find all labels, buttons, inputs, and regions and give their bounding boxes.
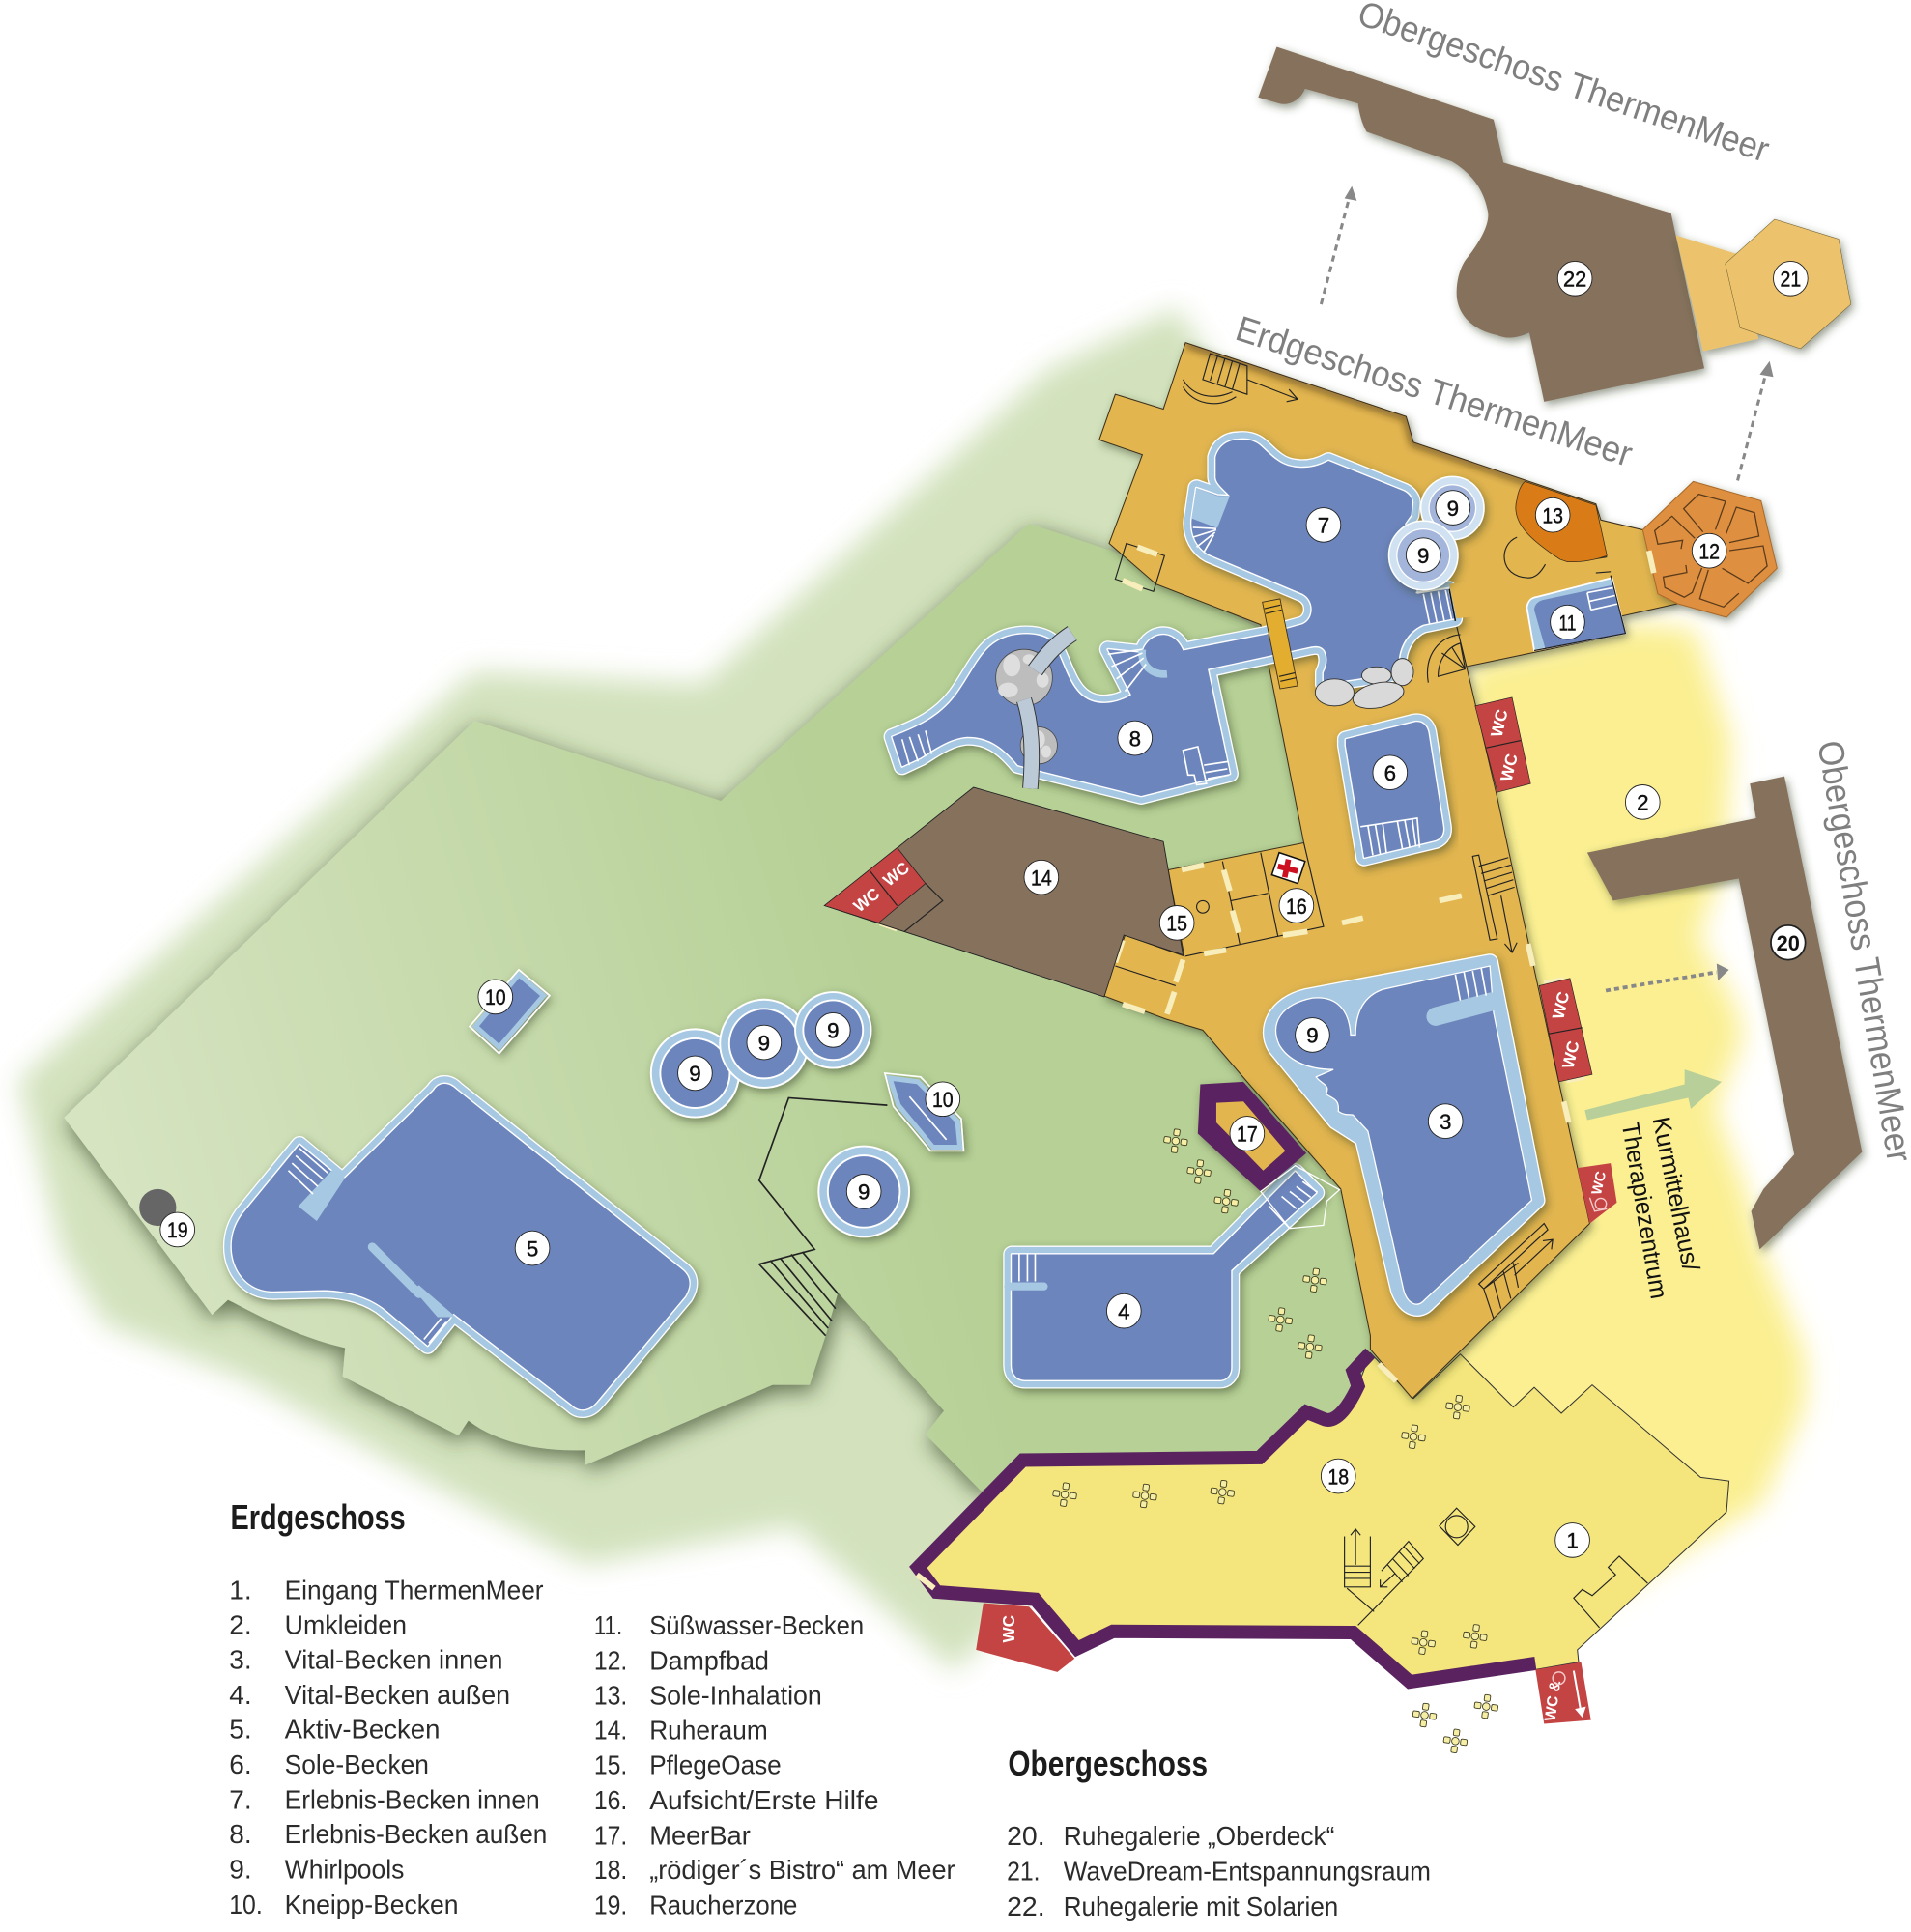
legend: ground floor column 1 [229,1576,547,1919]
legend: ground floor column 2: Ruheraum [649,1715,768,1745]
smoking zone dot [139,1189,176,1226]
Ruheraum WC block: WC [879,858,913,890]
number markers: 1 [1566,1529,1579,1553]
room 14: Ruheraum [824,787,1184,997]
legend: ground floor column 1: Eingang ThermenMeer [285,1576,544,1605]
WC lower bistro [976,1603,1074,1672]
number markers: 5 [527,1236,538,1261]
WC block right upper: WC [1497,752,1522,783]
number markers: 4 [1118,1299,1130,1323]
legend: ground floor column 2: 16. [594,1785,627,1815]
stones [1315,659,1413,713]
background halo: yellow area [1355,622,1806,1602]
staircase right [1472,855,1517,952]
number markers: 10 [932,1088,954,1112]
wall patch beside pool 7 stairs [1449,582,1477,618]
arrow: dotted to hexagon 21 [1738,361,1773,480]
legend: ground floor column 1: 5. [229,1715,252,1745]
pool 8 stairs [902,730,1229,784]
legend: upper floor: WaveDream-Entspannungsraum [1064,1856,1431,1886]
number markers: 16 [1286,895,1307,919]
pool 7 and 8: Erlebnis-Becken [893,440,1454,796]
heading: Obergeschoss: Obergeschoss [1008,1745,1208,1783]
legend: ground floor column 2: Raucherzone [649,1890,797,1920]
whirlpool outdoor single [817,1146,910,1237]
brown upper floor 22 [1258,46,1704,402]
heading: Erdgeschoss: Erdgeschoss [231,1498,406,1537]
number markers: 10 [485,985,506,1009]
legend: ground floor column 1: 8. [229,1819,252,1849]
connector and hexagon 21 [1676,219,1851,352]
number markers: 9 [1306,1024,1319,1048]
legend: ground floor column 2: MeerBar [649,1820,751,1850]
WC block right upper: WC [1487,707,1512,739]
legend: ground floor column 2: 13. [594,1681,627,1711]
panel: green outdoor area [64,524,1392,1491]
heading: Erdgeschoss ThermenMeer: Erdgeschoss ThermenMeer [1231,308,1638,474]
legend: ground floor column 2: PflegeOase [649,1750,782,1780]
legend: upper floor: 20. [1007,1821,1045,1851]
rock islands and bridges in pool 8 [996,634,1072,788]
legend: ground floor column 1: Aktiv-Becken [285,1715,440,1745]
number markers: 21 [1781,268,1801,292]
legend: ground floor column 1: Vital-Becken innen [285,1645,502,1675]
legend: ground floor column 2: Süßwasser-Becken [649,1610,864,1640]
legend: ground floor column 2: 17. [594,1820,627,1850]
legend: ground floor column 2: 18. [594,1855,627,1885]
arrow: dotted to upper floor left [1321,186,1356,304]
legend: ground floor column 2: Aufsicht/Erste Hilfe [649,1785,878,1815]
number markers: 8 [1129,726,1141,751]
accessible WC right lower [1578,1163,1617,1224]
legend: ground floor column 1: Erlebnis-Becken innen [285,1784,540,1814]
number markers: 18 [1327,1464,1349,1489]
number markers: 13 [1542,503,1563,527]
legend: ground floor column 2: 19. [594,1890,627,1920]
number markers: 14 [1031,866,1052,890]
panel: rooms 15 and 16 walls [1115,537,1611,985]
number markers: 9 [1417,544,1429,568]
WC block right middle [1539,979,1592,1082]
arrow: dotted to upper floor 20 [1606,963,1729,991]
legend: ground floor column 2 [594,1610,956,1920]
accessible WC right lower: WC [1589,1170,1610,1197]
legend: ground floor column 1: Erlebnis-Becken außen [285,1819,547,1849]
legend: ground floor column 2: Sole-Inhalation [649,1681,822,1711]
number markers: 11 [1559,611,1576,635]
outdoor fence line and steps [759,1097,887,1336]
text: Kurmittelhaus: Kurmittelhaus/ [1647,1115,1704,1274]
legend: ground floor column 1: Kneipp-Becken [285,1889,459,1919]
WC with arrow at entrance [1535,1662,1591,1723]
pool 8 fan stairs [1108,649,1167,692]
legend: ground floor column 2: 14. [594,1715,627,1745]
legend: ground floor column 1: 9. [229,1855,252,1885]
number markers [160,261,1808,1557]
dashed doors [880,547,1654,1588]
pool 6 [1346,722,1443,858]
number markers: 22 [1563,268,1586,292]
WC block right middle: WC [1548,990,1573,1021]
staircase lower [1479,1224,1553,1319]
legend: ground floor column 2: Dampfbad [649,1645,769,1675]
number markers: 12 [1698,539,1720,563]
legend: ground floor column 1: 6. [229,1749,252,1779]
Ruheraum WC block [824,848,943,931]
legend: ground floor column 2: 12. [594,1645,627,1675]
pool 4: Vital-Becken aussen [1008,1172,1318,1380]
legend: upper floor [1007,1821,1431,1921]
first aid icon [1271,853,1305,884]
background halo: green landscape [18,308,1355,1671]
Ruheraum WC block: WC [849,884,883,916]
legend: ground floor column 1: Sole-Becken [285,1749,429,1779]
legend: ground floor column 1: 4. [229,1680,252,1710]
WC block right upper [1475,697,1530,792]
legend: ground floor column 1: 10. [229,1889,263,1919]
wall line beside pool 7 [1449,589,1455,621]
number markers: 9 [858,1180,870,1205]
room 13: Sole-Inhalation [1516,481,1607,562]
legend: upper floor: Ruhegalerie „Oberdeck“ [1064,1821,1334,1851]
number markers: 20 [1777,931,1800,955]
legend: ground floor column 2: 15. [594,1750,627,1780]
legend: upper floor: Ruhegalerie mit Solarien [1064,1891,1338,1921]
number markers: 7 [1318,514,1329,538]
legend: upper floor: 22. [1007,1891,1045,1921]
panel: yellow entrance and bistro floor [918,1353,1729,1682]
pool 5: Aktiv-Becken [232,1084,690,1409]
pool 11 [1526,576,1625,650]
number markers: 19 [167,1218,188,1242]
WC lower bistro: WC [999,1615,1018,1643]
pool 7 stair landing and fan [1191,488,1230,552]
pool 10: Kneipp-Becken upper [470,970,550,1054]
number markers: 17 [1237,1122,1258,1147]
pool 3: Vital-Becken innen [1271,962,1537,1308]
legend: upper floor: 21. [1007,1856,1041,1886]
entrance hall details [1345,1508,1647,1628]
number markers: 2 [1637,791,1648,815]
purple wall of the bistro [918,1353,1535,1682]
terrace outline by MeerBar [1261,1166,1340,1229]
arrow: green to Kurmittelhaus [1584,1069,1722,1120]
legend: ground floor column 2: „rödiger´s Bistro“ am Meer [649,1855,956,1885]
legend: ground floor column 1: Umkleiden [285,1609,407,1639]
bridge over channel [1263,599,1298,689]
flowers [1051,1127,1499,1754]
room 12: Dampfbad [1642,481,1777,617]
WC block right middle: WC [1558,1039,1583,1070]
curved stair by pool 7 [1428,635,1466,683]
number markers: 15 [1166,912,1187,936]
legend: ground floor column 1: 7. [229,1784,252,1814]
number markers: 9 [1447,497,1459,521]
brown upper floor 20 [1587,777,1862,1249]
legend: ground floor column 2: 11. [594,1610,622,1640]
pool 7 stairs [1416,587,1452,623]
legend: ground floor column 1: 1. [229,1576,252,1605]
staircase top [1184,354,1298,404]
panel: orange ground floor ThermenMeer [1099,343,1677,1399]
whirlpools indoor [1389,476,1484,590]
whirlpools outdoor [650,991,871,1119]
legend: ground floor column 1: Vital-Becken außen [285,1680,510,1710]
legend: ground floor column 1: 2. [229,1609,252,1639]
text: Therapiezentrum: Therapiezentrum [1616,1121,1672,1301]
number markers: 9 [689,1062,701,1086]
inner shadow along upper wall [1185,344,1596,505]
legend: ground floor column 1: 3. [229,1645,252,1675]
MeerBar 17 [1198,1082,1306,1191]
number markers: 9 [758,1031,770,1055]
number markers: 6 [1384,761,1396,785]
legend: ground floor column 1: Whirlpools [285,1855,404,1885]
pool 10: Kneipp-Becken lower [885,1073,963,1151]
number markers: 9 [827,1019,839,1043]
number markers: 3 [1440,1110,1451,1134]
WC with arrow at entrance: WC & [1542,1679,1564,1722]
